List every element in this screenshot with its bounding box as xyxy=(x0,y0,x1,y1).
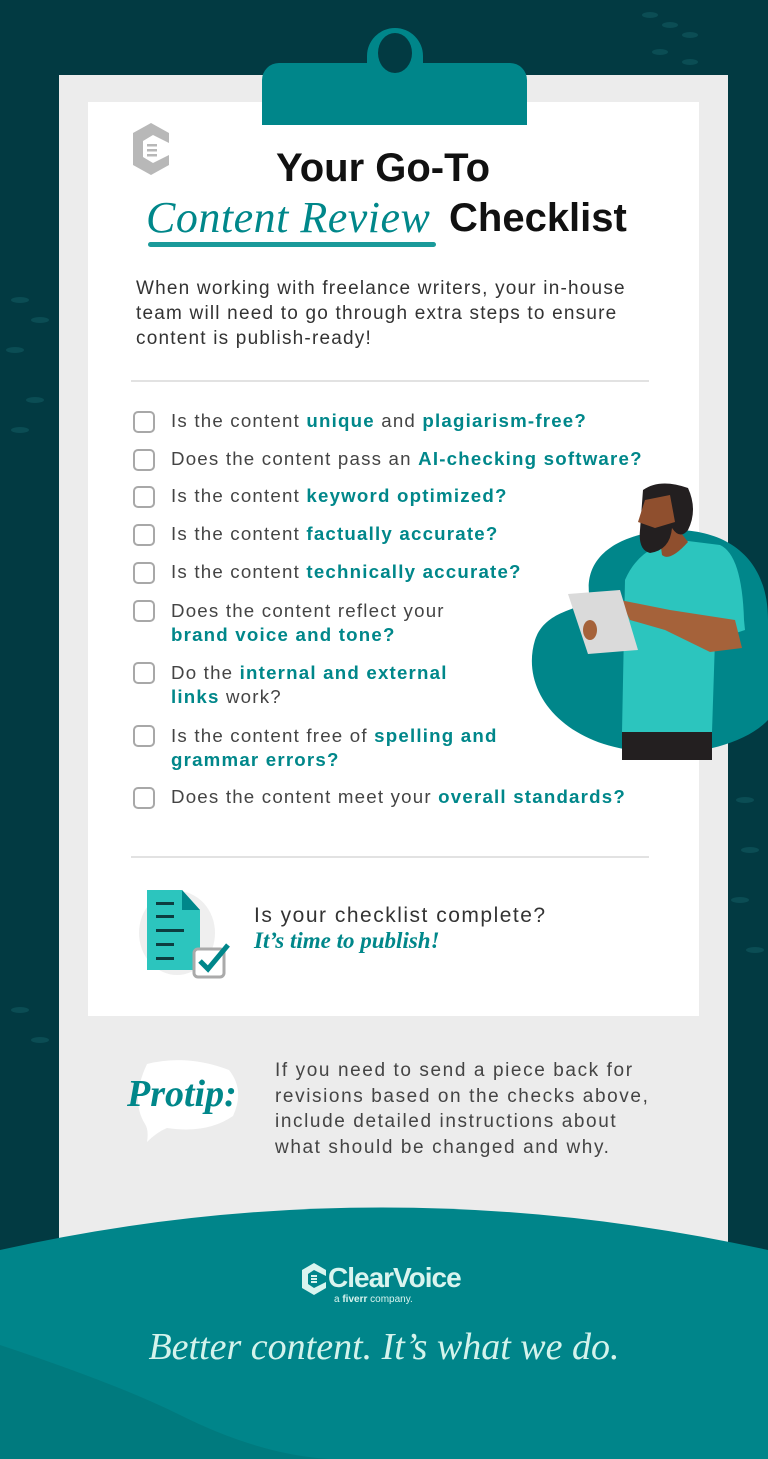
checklist: Is the content technically accurate? xyxy=(171,561,522,582)
logo icon xyxy=(133,123,169,175)
intro text xyxy=(136,278,626,349)
checklist: links work? xyxy=(171,686,282,707)
checklist: Does the content reflect your xyxy=(171,600,445,621)
checklist: Is the content unique and plagiarism-free? xyxy=(171,410,587,431)
checklist: grammar errors? xyxy=(171,749,340,770)
checklist: Is the content free of spelling and xyxy=(171,725,498,746)
completion callout: It’s time to publish! xyxy=(254,928,440,953)
clipboard board xyxy=(59,75,728,1275)
footer logo: a fiverr company. xyxy=(334,1294,413,1305)
intro text: team will need to go through extra steps to ensure xyxy=(136,303,617,324)
checklist: Do the internal and external xyxy=(171,662,448,683)
checklist: Is the content keyword optimized? xyxy=(171,485,508,506)
tagline: Better content. It’s what we do. xyxy=(148,1326,620,1368)
checklist xyxy=(133,410,643,809)
intro text: When working with freelance writers, your in-house xyxy=(136,278,626,299)
text: include detailed instructions about xyxy=(275,1111,617,1132)
protip xyxy=(127,1060,238,1142)
checklist: Is the content factually accurate? xyxy=(171,523,498,544)
checklist: Does the content pass an AI-checking software? xyxy=(171,448,643,469)
protip: Protip: xyxy=(127,1073,237,1115)
footer wave xyxy=(0,1208,768,1459)
title: Checklist xyxy=(449,196,627,240)
title xyxy=(146,146,627,247)
icon: document with check xyxy=(139,890,230,978)
text: revisions based on the checks above, xyxy=(275,1086,649,1106)
completion callout xyxy=(254,904,547,953)
clip xyxy=(262,28,527,125)
footer logo xyxy=(302,1262,461,1305)
illustration: man with tablet xyxy=(532,484,768,760)
title: Your Go-To xyxy=(276,146,490,190)
intro text: content is publish-ready! xyxy=(136,328,372,349)
checklist: brand voice and tone? xyxy=(171,624,396,645)
title: Content Review xyxy=(146,193,430,242)
text: what should be changed and why. xyxy=(275,1136,611,1158)
completion callout: Is your checklist complete? xyxy=(254,904,547,927)
footer logo: ClearVoice xyxy=(328,1262,461,1293)
text: If you need to send a piece back for xyxy=(275,1060,634,1081)
checklist: Does the content meet your overall standards? xyxy=(171,786,626,807)
paper xyxy=(88,102,699,1016)
